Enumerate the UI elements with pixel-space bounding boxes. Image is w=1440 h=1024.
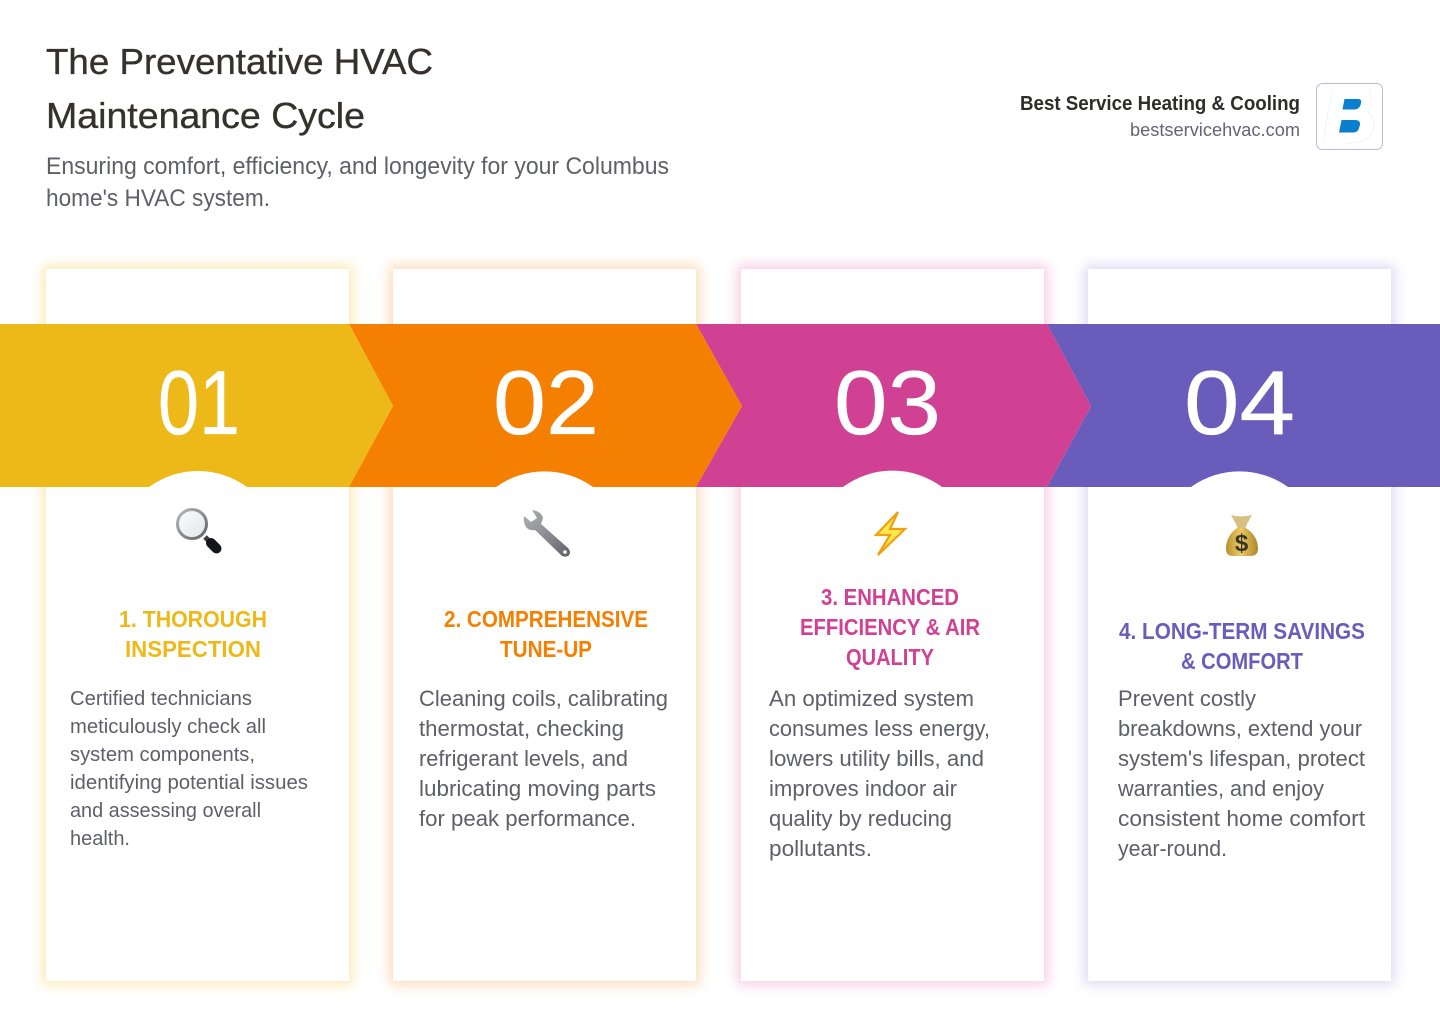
number 02: 02 [493,353,599,454]
text: step 3 description: lowers utility bills, and [769,746,984,771]
text: step 1 description: identifying potential issues [70,772,308,794]
brand name and website: bestservicehvac.com [1130,120,1300,140]
brand name and website: Best Service Heating & Cooling [1020,92,1300,115]
white circle notches on band [149,471,1288,487]
text: step 4 description [1117,686,1366,861]
icon: money bag [1226,515,1258,557]
text: step 1 description: and assessing overall [70,800,261,822]
text: step 1 description: meticulously check all [70,716,266,738]
heading: step 4 [1119,618,1365,674]
icon: lightning bolt [876,512,905,555]
subtitle [46,153,669,212]
icon: wrench [524,510,570,557]
panel: step 2 comprehensive tune-up [389,265,700,985]
text: step 4 description: year-round. [1118,836,1227,861]
icon: money bag: $ [1235,530,1249,557]
heading: step 2 [444,606,648,662]
text: step 3 description: pollutants. [769,836,872,861]
text: step 1 description: health. [70,828,130,850]
arrow: step 3 chevron [696,324,1091,487]
text: step 3 description [769,686,990,861]
number 01: 01 [158,353,240,454]
icon: brand logo [1316,84,1382,150]
arrow: step 4 chevron [1047,324,1440,487]
heading: step 1 [119,606,267,662]
heading: step 4: 4. LONG-TERM SAVINGS [1119,618,1365,644]
text: step 4 description: consistent home comfort [1118,806,1366,831]
text: step 3 description: quality by reducing [769,806,952,831]
heading: step 1: INSPECTION [125,636,261,662]
panel: step 3 enhanced efficiency and air quality [737,265,1048,985]
text: step 2 description: refrigerant levels, and [419,746,628,771]
arrow: step 2 chevron [349,324,742,487]
panel: step 4 long-term savings and comfort [1084,265,1395,985]
heading: step 1: 1. THOROUGH [119,606,267,632]
text: step 2 description: Cleaning coils, calibrating [419,686,668,711]
heading: step 3: EFFICIENCY & AIR [800,614,980,640]
text: step 1 description: Certified technicians [70,688,252,710]
text: step 2 description: for peak performance. [419,806,636,831]
panel: step 1 thorough inspection [42,265,353,985]
arrow band: numbered chevrons [0,324,1440,487]
number 04: 04 [1184,353,1295,454]
heading: step 2: TUNE-UP [500,636,592,662]
heading: step 4: & COMFORT [1181,648,1303,674]
number 03: 03 [834,353,941,454]
text: step 3 description: improves indoor air [769,776,957,801]
subtitle: home's HVAC system. [46,185,270,212]
text: step 4 description: Prevent costly [1118,686,1257,711]
heading: step 3 [800,584,980,670]
text: step 1 description: system components, [70,744,255,766]
brand name and website [1020,92,1300,140]
subtitle: Ensuring comfort, efficiency, and longevity for your Columbus [46,153,669,180]
text: step 4 description: system's lifespan, protect [1118,746,1366,771]
icon: magnifying glass [178,510,216,548]
text: step 2 description [419,686,668,831]
title: Maintenance Cycle [46,95,365,136]
heading: step 2: 2. COMPREHENSIVE [444,606,648,632]
text: step 2 description: lubricating moving parts [419,776,656,801]
text: step 4 description: warranties, and enjoy [1117,776,1325,801]
text: step 2 description: thermostat, checking [419,716,624,741]
title: The Preventative HVAC [46,41,433,82]
heading: step 3: 3. ENHANCED [821,584,959,610]
text: step 1 description [70,688,308,850]
title [46,41,433,136]
text: step 3 description: An optimized system [769,686,974,711]
text: step 3 description: consumes less energy, [769,716,990,741]
heading: step 3: QUALITY [846,644,934,670]
text: step 4 description: breakdowns, extend your [1118,716,1362,741]
arrow: step 1 chevron [0,324,393,487]
